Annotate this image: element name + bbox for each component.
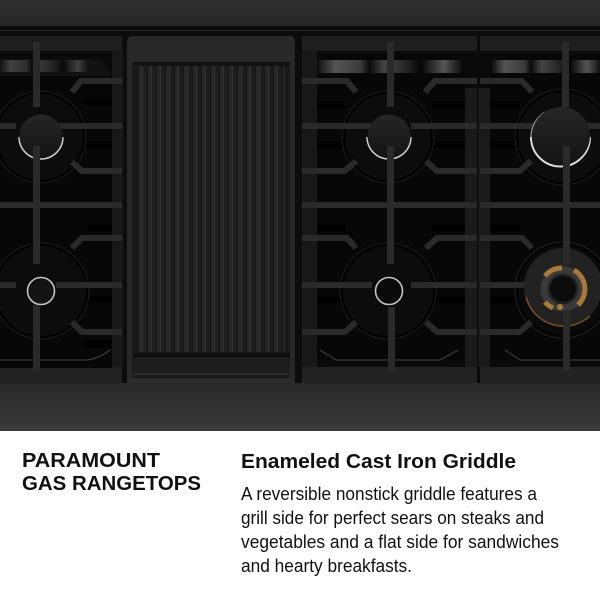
heading: product line: GAS RANGETOPS xyxy=(22,473,201,495)
photo: cooktop xyxy=(0,0,600,431)
bottom right burner with brass ring xyxy=(524,248,600,326)
heading: product line: PARAMOUNT xyxy=(22,450,160,472)
griddle ribs xyxy=(139,66,285,352)
griddle xyxy=(123,36,302,383)
heading: product line xyxy=(22,450,201,495)
bottom middle burner xyxy=(376,278,402,304)
body text xyxy=(241,483,559,576)
vertical grate fingers xyxy=(33,42,570,371)
bottom steel band xyxy=(0,383,600,431)
top left burner xyxy=(19,114,63,159)
top steel band xyxy=(0,0,600,27)
body text: and hearty breakfasts. xyxy=(241,555,412,576)
top middle burner xyxy=(367,114,411,159)
grate bars xyxy=(0,81,600,332)
top right burner xyxy=(531,107,590,166)
left burner section xyxy=(0,36,126,383)
middle burner section xyxy=(302,36,477,383)
body text: vegetables and a flat side for sandwiches xyxy=(241,531,559,552)
right burner section xyxy=(478,36,600,383)
body text: A reversible nonstick griddle features a xyxy=(241,483,538,504)
griddle trough xyxy=(134,353,290,373)
heading: feature: Enameled Cast Iron Griddle xyxy=(241,450,516,473)
body text: grill side for perfect sears on steaks and xyxy=(241,507,544,528)
bottom left burner xyxy=(28,278,54,304)
